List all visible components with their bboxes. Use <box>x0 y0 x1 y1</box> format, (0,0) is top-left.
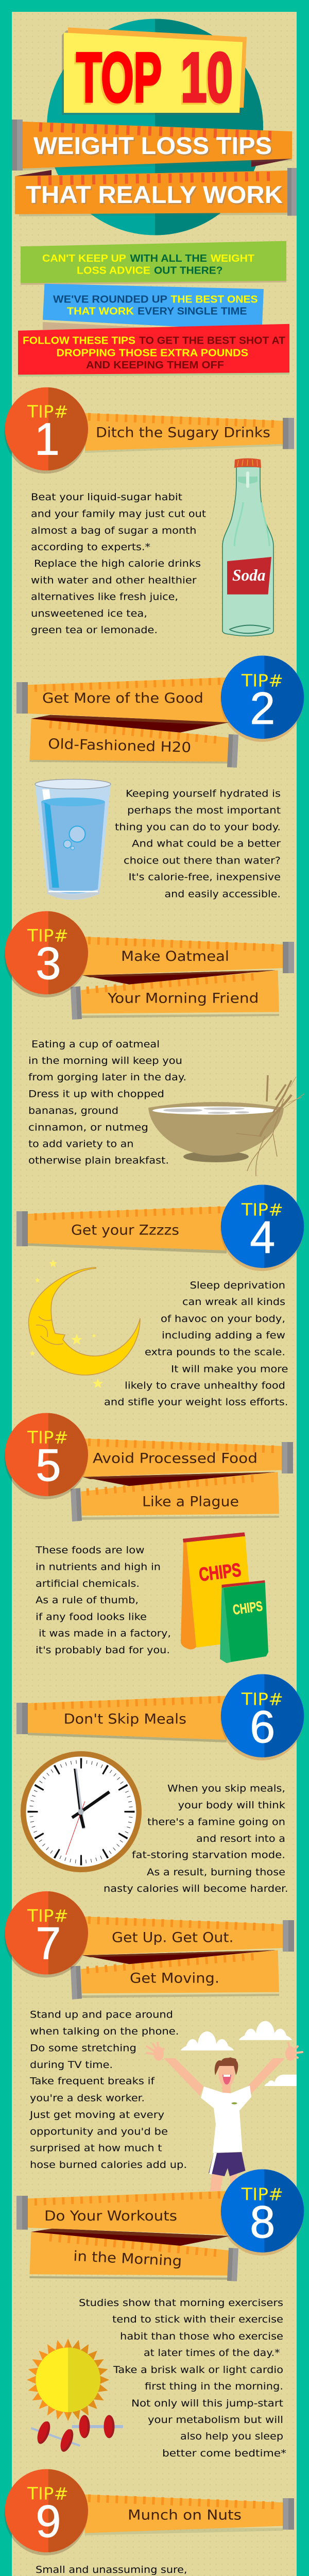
teal circle behind title <box>47 19 263 235</box>
callout: blue <box>43 284 264 330</box>
banner: weight loss tips <box>12 120 292 171</box>
panel: tip 4 <box>16 1185 304 1408</box>
callout: red: TO GET THE BEST SHOT AT <box>139 335 285 347</box>
title card <box>62 27 247 118</box>
title card: 10 <box>179 40 231 118</box>
text: tip 4 body: including adding a few <box>162 1330 285 1341</box>
text: tip 5 body: in nutrients and high in <box>36 1562 161 1573</box>
badge: tip 6: TIP# <box>241 1689 283 1709</box>
text: tip 1 body: according to experts.* <box>31 541 150 553</box>
text: tip 7 body: Just get moving at every <box>29 2109 164 2121</box>
badge: tip 9: 9 <box>36 2496 61 2547</box>
text: tip 3 body: in the morning will keep you <box>28 1055 182 1066</box>
badge: tip 1: TIP# <box>27 402 68 422</box>
banner: weight loss tips: WEIGHT LOSS TIPS <box>33 132 272 159</box>
text: tip 1 body: Replace the high calorie drinks <box>34 558 201 569</box>
panel: tip 5 <box>4 1413 293 1663</box>
text: tip 7 body: during TV time. <box>30 2059 113 2071</box>
badge: tip 7 <box>4 1891 88 1977</box>
text: tip 6 body: As a result, burning those <box>147 1867 285 1878</box>
text: tip 5 body: it was made in a factory, <box>39 1628 171 1639</box>
text: tip 4 body: and stifle your weight loss efforts. <box>104 1397 288 1408</box>
text: tip 8 body: first thing in the morning. <box>145 2381 283 2392</box>
callout: green: WITH ALL THE <box>130 253 207 264</box>
ribbon: tip 8 lower: in the Morning <box>73 2248 182 2269</box>
badge: tip 3 <box>4 911 88 997</box>
ribbon: tip 7 lower <box>71 1950 279 1999</box>
text: tip 2 body: and easily accessible. <box>165 889 281 900</box>
banner fold <box>15 159 292 176</box>
text: tip 5 body: if any food looks like <box>36 1612 147 1623</box>
badge: tip 2 <box>220 655 304 742</box>
ribbon fold: tip 2 <box>31 715 230 733</box>
text: tip 1 body: alternatives like fresh juice, <box>31 591 178 603</box>
text: tip 8 body <box>79 2297 286 2459</box>
ribbon fold: tip 5 <box>82 1472 276 1486</box>
text: tip 5 body: These foods are low <box>35 1545 144 1556</box>
icon: dumbbells <box>31 2415 123 2453</box>
text: tip 8 body: Not only will this jump-start <box>131 2398 283 2409</box>
text: tip 2 body <box>115 788 281 900</box>
badge: tip 6: 6 <box>250 1701 275 1752</box>
ribbon: tip 2 upper: Get More of the Good <box>42 690 203 706</box>
badge: tip 4: TIP# <box>241 1200 283 1220</box>
icon: soda bottle <box>222 459 273 636</box>
callout: red <box>18 324 289 377</box>
callout: red: AND KEEPING THEM OFF <box>86 360 224 371</box>
icon: water glass <box>35 779 111 900</box>
badge: tip 7: TIP# <box>27 1906 68 1926</box>
text: tip 5 body: As a rule of thumb, <box>36 1595 139 1606</box>
callout: red: DROPPING THOSE EXTRA POUNDS <box>57 348 248 359</box>
ribbon fold: tip 3 <box>82 970 276 985</box>
ribbon: tip 6 <box>16 1696 227 1742</box>
ribbon fold: tip 8 <box>31 2229 230 2246</box>
callout: blue: EVERY SINGLE TIME <box>138 306 247 317</box>
text: tip 6 body <box>104 1783 288 1894</box>
panel: tip 3 <box>4 911 304 1176</box>
text: tip 4 body: likely to crave unhealthy food <box>125 1380 285 1392</box>
ribbon: tip 2 lower <box>29 719 238 768</box>
text: tip 7 body <box>29 2009 187 2171</box>
panel: tip 1 <box>4 387 294 636</box>
text: tip 2 body: perhaps the most important <box>127 805 281 816</box>
ribbon: tip 8 upper: Do Your Workouts <box>44 2208 177 2224</box>
ribbon: tip 4 <box>16 1207 227 1253</box>
icon: chips bags: CHIPS <box>232 1598 264 1618</box>
text: tip 2 body: thing you can do to your body. <box>115 822 281 833</box>
icon: chips bags: CHIPS <box>198 1559 242 1585</box>
ribbon: tip 1: Ditch the Sugary Drinks <box>96 425 270 440</box>
text: tip 1 body: and your family may just cut out <box>31 508 206 519</box>
panel: tip 6 <box>16 1674 304 1894</box>
panel: tip 8 <box>16 2169 304 2459</box>
callout: green: WEIGHT <box>211 253 254 264</box>
text: tip 8 body: habit than those who exercise <box>120 2331 283 2342</box>
badge: tip 5: 5 <box>36 1439 61 1490</box>
title card: TOP <box>75 40 160 118</box>
text: tip 3 body: otherwise plain breakfast. <box>28 1155 169 1166</box>
ribbon: tip 9: Munch on Nuts <box>128 2507 242 2523</box>
text: tip 3 body: to add variety to an <box>28 1139 134 1150</box>
text: tip 4 body: Sleep deprivation <box>190 1280 285 1291</box>
text: tip 3 body: Dress it up with chopped <box>28 1089 164 1100</box>
callout: green: LOSS ADVICE <box>77 265 150 277</box>
badge: tip 8: TIP# <box>241 2184 283 2205</box>
text: tip 1 body: Beat your liquid-sugar habit <box>31 492 182 503</box>
text: tip 7 body: Do some stretching <box>30 2043 136 2054</box>
badge: tip 9 <box>4 2469 88 2555</box>
ribbon: tip 4: Get your Zzzzs <box>71 1223 179 1239</box>
icon: jumping man <box>147 2043 302 2191</box>
callout: blue: WE'VE ROUNDED UP <box>53 294 167 306</box>
badge: tip 1: 1 <box>35 413 60 465</box>
icon: chips bags <box>181 1532 268 1663</box>
callout: green: CAN'T KEEP UP <box>42 253 126 264</box>
banner: that really work <box>15 168 297 216</box>
text: tip 8 body: your metabolism but will <box>148 2414 283 2426</box>
badge: tip 8: 8 <box>250 2196 275 2247</box>
text: tip 7 body: hose burned calories add up. <box>30 2159 187 2171</box>
ribbon: tip 7 upper: Get Up. Get Out. <box>112 1929 234 1945</box>
text: tip 3 body: Eating a cup of oatmeal <box>31 1039 160 1050</box>
badge: tip 2: TIP# <box>241 671 283 691</box>
text: tip 2 body: choice out there than water? <box>124 855 281 867</box>
text: tip 1 body: unsweetened ice tea, <box>31 608 147 619</box>
icon: wall clock <box>21 1751 142 1872</box>
text: tip 8 body: better come bedtime* <box>162 2448 286 2459</box>
icon: sun <box>27 2338 109 2421</box>
ribbon fold: tip 7 <box>82 1950 276 1964</box>
icon: clouds <box>181 2021 297 2086</box>
callout: red: FOLLOW THESE TIPS <box>23 335 135 347</box>
text: tip 4 body: extra pounds to the scale. <box>145 1347 285 1358</box>
text: tip 6 body: When you skip meals, <box>167 1783 285 1794</box>
ribbon: tip 8 upper <box>16 2191 227 2235</box>
text: tip 1 body <box>31 492 206 636</box>
text: tip 6 body: nasty calories will become harder. <box>104 1883 288 1894</box>
badge: tip 3: 3 <box>36 938 61 989</box>
text: tip 5 body: it's probably bad for you. <box>36 1645 170 1656</box>
text: tip 2 body: And what could be a better <box>132 838 281 850</box>
icon: oatmeal bowl <box>148 1075 304 1176</box>
header: title block <box>12 19 297 235</box>
text: tip 3 body <box>28 1039 186 1166</box>
text: tip 7 body: you're a desk worker. <box>30 2093 145 2104</box>
badge: tip 4: 4 <box>250 1212 275 1263</box>
text: tip 6 body: fat-storing starvation mode. <box>132 1850 285 1861</box>
text: tip 7 body: when talking on the phone. <box>30 2026 179 2037</box>
ribbon: tip 5 lower <box>71 1472 279 1521</box>
title card: TOP <box>76 38 162 116</box>
text: tip 4 body: can wreak all kinds <box>182 1296 285 1308</box>
banner: that really work: THAT REALLY WORK <box>26 181 283 208</box>
ribbon: tip 8 lower <box>29 2232 238 2281</box>
text: tip 3 body: from gorging later in the day. <box>28 1072 186 1083</box>
icon: moon and stars <box>29 1259 140 1388</box>
text: tip 6 body: your body will think <box>178 1800 285 1811</box>
panel: tip 2 <box>16 655 304 900</box>
banner: weight loss tips: WEIGHT LOSS TIPS <box>35 133 273 161</box>
text: tip 4 body <box>104 1280 288 1408</box>
ribbon: tip 5 lower: Like a Plague <box>142 1494 239 1510</box>
badge: tip 6 <box>220 1674 304 1760</box>
text: tip 2 body: Keeping yourself hydrated is <box>126 788 281 800</box>
ribbon: tip 3 lower: Your Morning Friend <box>107 991 259 1007</box>
text: tip 7 body: Stand up and pace around <box>30 2009 173 2021</box>
text: tip 8 body: at later times of the day.* <box>144 2347 280 2359</box>
callout: green: OUT THERE? <box>154 265 222 277</box>
badge: tip 5 <box>4 1413 88 1499</box>
ribbon: tip 2 lower: Old-Fashioned H20 <box>48 736 192 756</box>
text: tip 4 body: It will make you more <box>171 1364 288 1375</box>
text: tip 9 body: Small and unassuming sure, <box>36 2564 187 2575</box>
ribbon: tip 1 <box>85 413 294 453</box>
ribbon: tip 7 lower: Get Moving. <box>130 1970 219 1986</box>
title card: 10 <box>181 38 233 116</box>
text: tip 2 body: It's calorie-free, inexpensive <box>129 872 281 883</box>
ribbon: tip 3 lower <box>71 970 279 1020</box>
ribbon: tip 5 upper <box>82 1438 293 1477</box>
ribbon: tip 3 upper <box>82 937 294 975</box>
text: tip 6 body: there's a famine going on <box>147 1817 285 1828</box>
text: tip 7 body: Take frequent breaks if <box>29 2076 155 2087</box>
text: tip 8 body: also help you sleep <box>180 2431 283 2442</box>
callout: blue: THAT WORK <box>67 306 134 317</box>
ribbon: tip 3 upper: Make Oatmeal <box>121 948 229 964</box>
icon: soda bottle: Soda <box>232 566 266 584</box>
badge: tip 1 <box>4 387 88 473</box>
callout: green <box>21 241 286 285</box>
text: tip 5 body <box>35 1545 171 1656</box>
text: tip 1 body: green tea or lemonade. <box>31 624 158 636</box>
text: tip 3 body: bananas, ground <box>28 1105 118 1116</box>
ribbon: tip 9 <box>84 2495 294 2535</box>
badge: tip 9: TIP# <box>27 2484 68 2504</box>
ribbon: tip 6: Don't Skip Meals <box>64 1711 186 1727</box>
text: tip 1 body: with water and other healthier <box>31 575 197 586</box>
text: tip 8 body: tend to stick with their exercise <box>112 2314 283 2325</box>
ribbon: tip 2 upper <box>16 677 227 722</box>
badge: tip 4 <box>220 1185 304 1271</box>
callout: blue: THE BEST ONES <box>171 294 258 306</box>
text: tip 8 body: Take a brisk walk or light cardio <box>113 2364 283 2376</box>
banner: that really work: THAT REALLY WORK <box>27 182 284 209</box>
text: tip 6 body: and resort into a <box>196 1833 285 1844</box>
badge: tip 5: TIP# <box>27 1428 68 1448</box>
text: tip 5 body: artificial chemicals. <box>36 1578 140 1589</box>
badge: tip 3: TIP# <box>27 926 68 946</box>
text: tip 3 body: cinnamon, or nutmeg <box>28 1122 148 1133</box>
text: tip 7 body: opportunity and you'd be <box>30 2126 168 2138</box>
panel: tip 9 <box>4 2469 294 2576</box>
badge: tip 7: 7 <box>36 1918 61 1969</box>
text: tip 4 body: of havoc on your body, <box>161 1313 285 1325</box>
panel: tip 7 <box>4 1891 302 2191</box>
text: tip 7 body: surprised at how much t <box>30 2143 162 2154</box>
text: tip 8 body: Studies show that morning exercisers <box>79 2297 283 2309</box>
ribbon: tip 5 upper: Avoid Processed Food <box>93 1450 258 1466</box>
badge: tip 8 <box>220 2169 304 2256</box>
ribbon: tip 7 upper <box>82 1917 294 1955</box>
text: tip 1 body: almost a bag of sugar a month <box>31 525 197 536</box>
badge: tip 2: 2 <box>250 683 275 734</box>
